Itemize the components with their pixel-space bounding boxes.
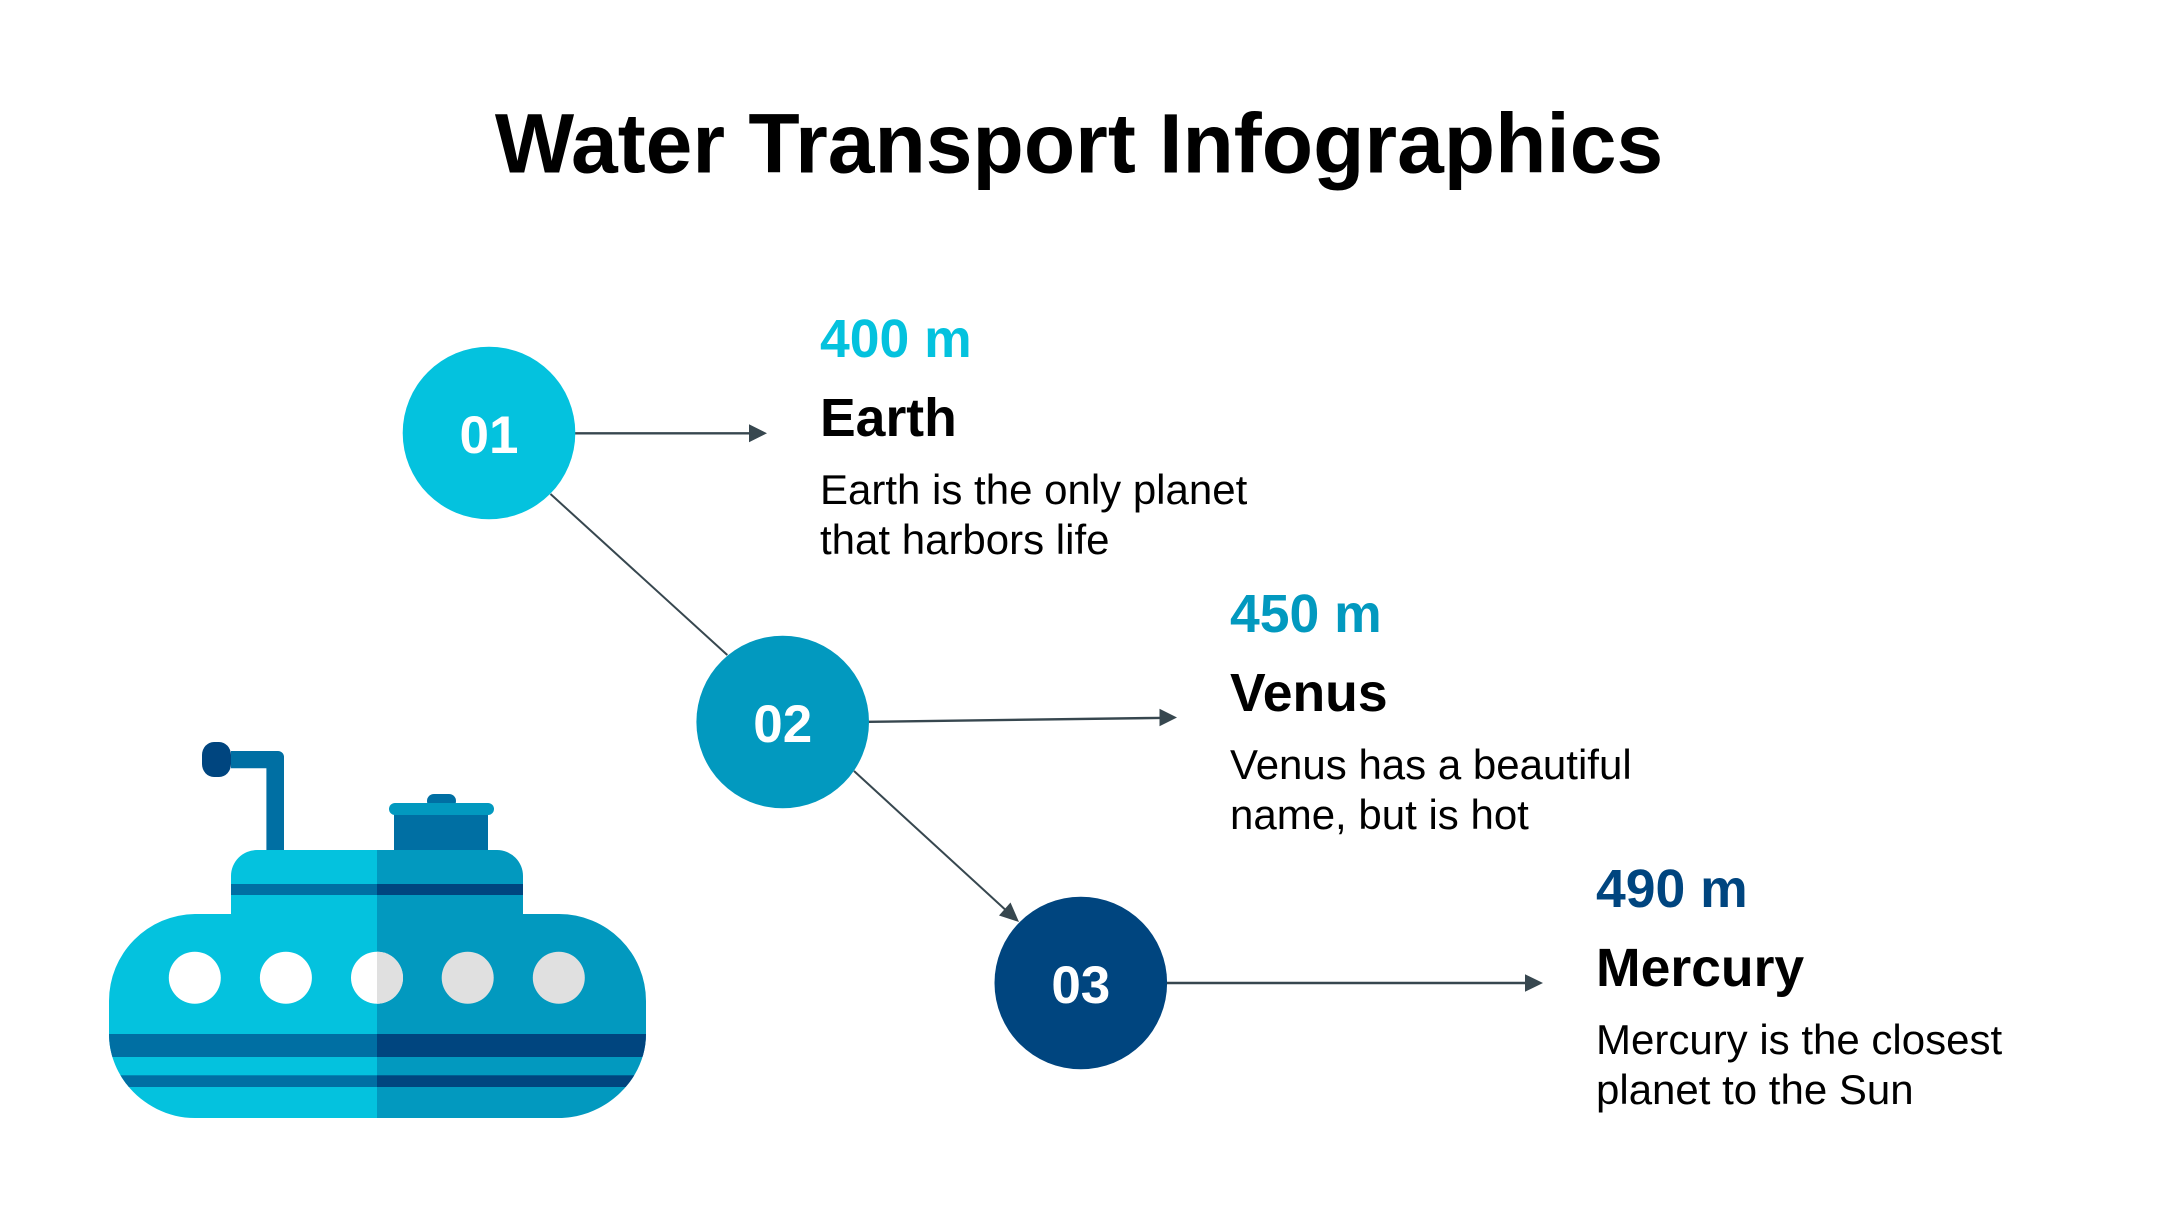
hull: [109, 850, 646, 1118]
text block: Earth: Earth: [820, 389, 957, 448]
text block: Mercury: Mercury is the closest: [1596, 1016, 2002, 1063]
arrow: 02 to Venus: [869, 709, 1177, 726]
text block: Venus: name, but is hot: [1230, 791, 1529, 838]
step circle 03: [995, 897, 1167, 1069]
connector arrow: 02 to 03: [854, 771, 1019, 922]
title: Water Transport Infographics: [495, 97, 1663, 191]
text block: Venus: [1230, 585, 1632, 838]
illustration: submarine: [100, 742, 657, 1130]
text block: Earth: Earth is the only planet: [820, 466, 1248, 513]
step circle 02: [696, 636, 869, 808]
step circle 01: [403, 347, 575, 519]
text block: Earth: that harbors life: [820, 516, 1110, 563]
step circle 01: 01: [460, 406, 518, 465]
text block: Mercury: [1596, 860, 2002, 1113]
text block: Earth: 400 m: [820, 310, 972, 369]
arrow: 01 to Earth: [575, 424, 767, 442]
text block: Earth: [820, 310, 1248, 563]
text block: Venus: Venus has a beautiful: [1230, 741, 1632, 788]
text block: Mercury: Mercury: [1596, 939, 1804, 998]
step circle 03: 03: [1051, 956, 1110, 1015]
text block: Mercury: 490 m: [1596, 860, 1748, 919]
periscope: [202, 742, 284, 852]
text block: Mercury: planet to the Sun: [1596, 1066, 1914, 1113]
step circle 02: 02: [753, 695, 812, 754]
arrow: 03 to Mercury: [1167, 974, 1543, 992]
portholes: [169, 952, 585, 1004]
hatch: [389, 794, 494, 852]
text block: Venus: Venus: [1230, 664, 1388, 723]
connector: 01 to 02: [550, 494, 727, 655]
text block: Venus: 450 m: [1230, 585, 1382, 644]
